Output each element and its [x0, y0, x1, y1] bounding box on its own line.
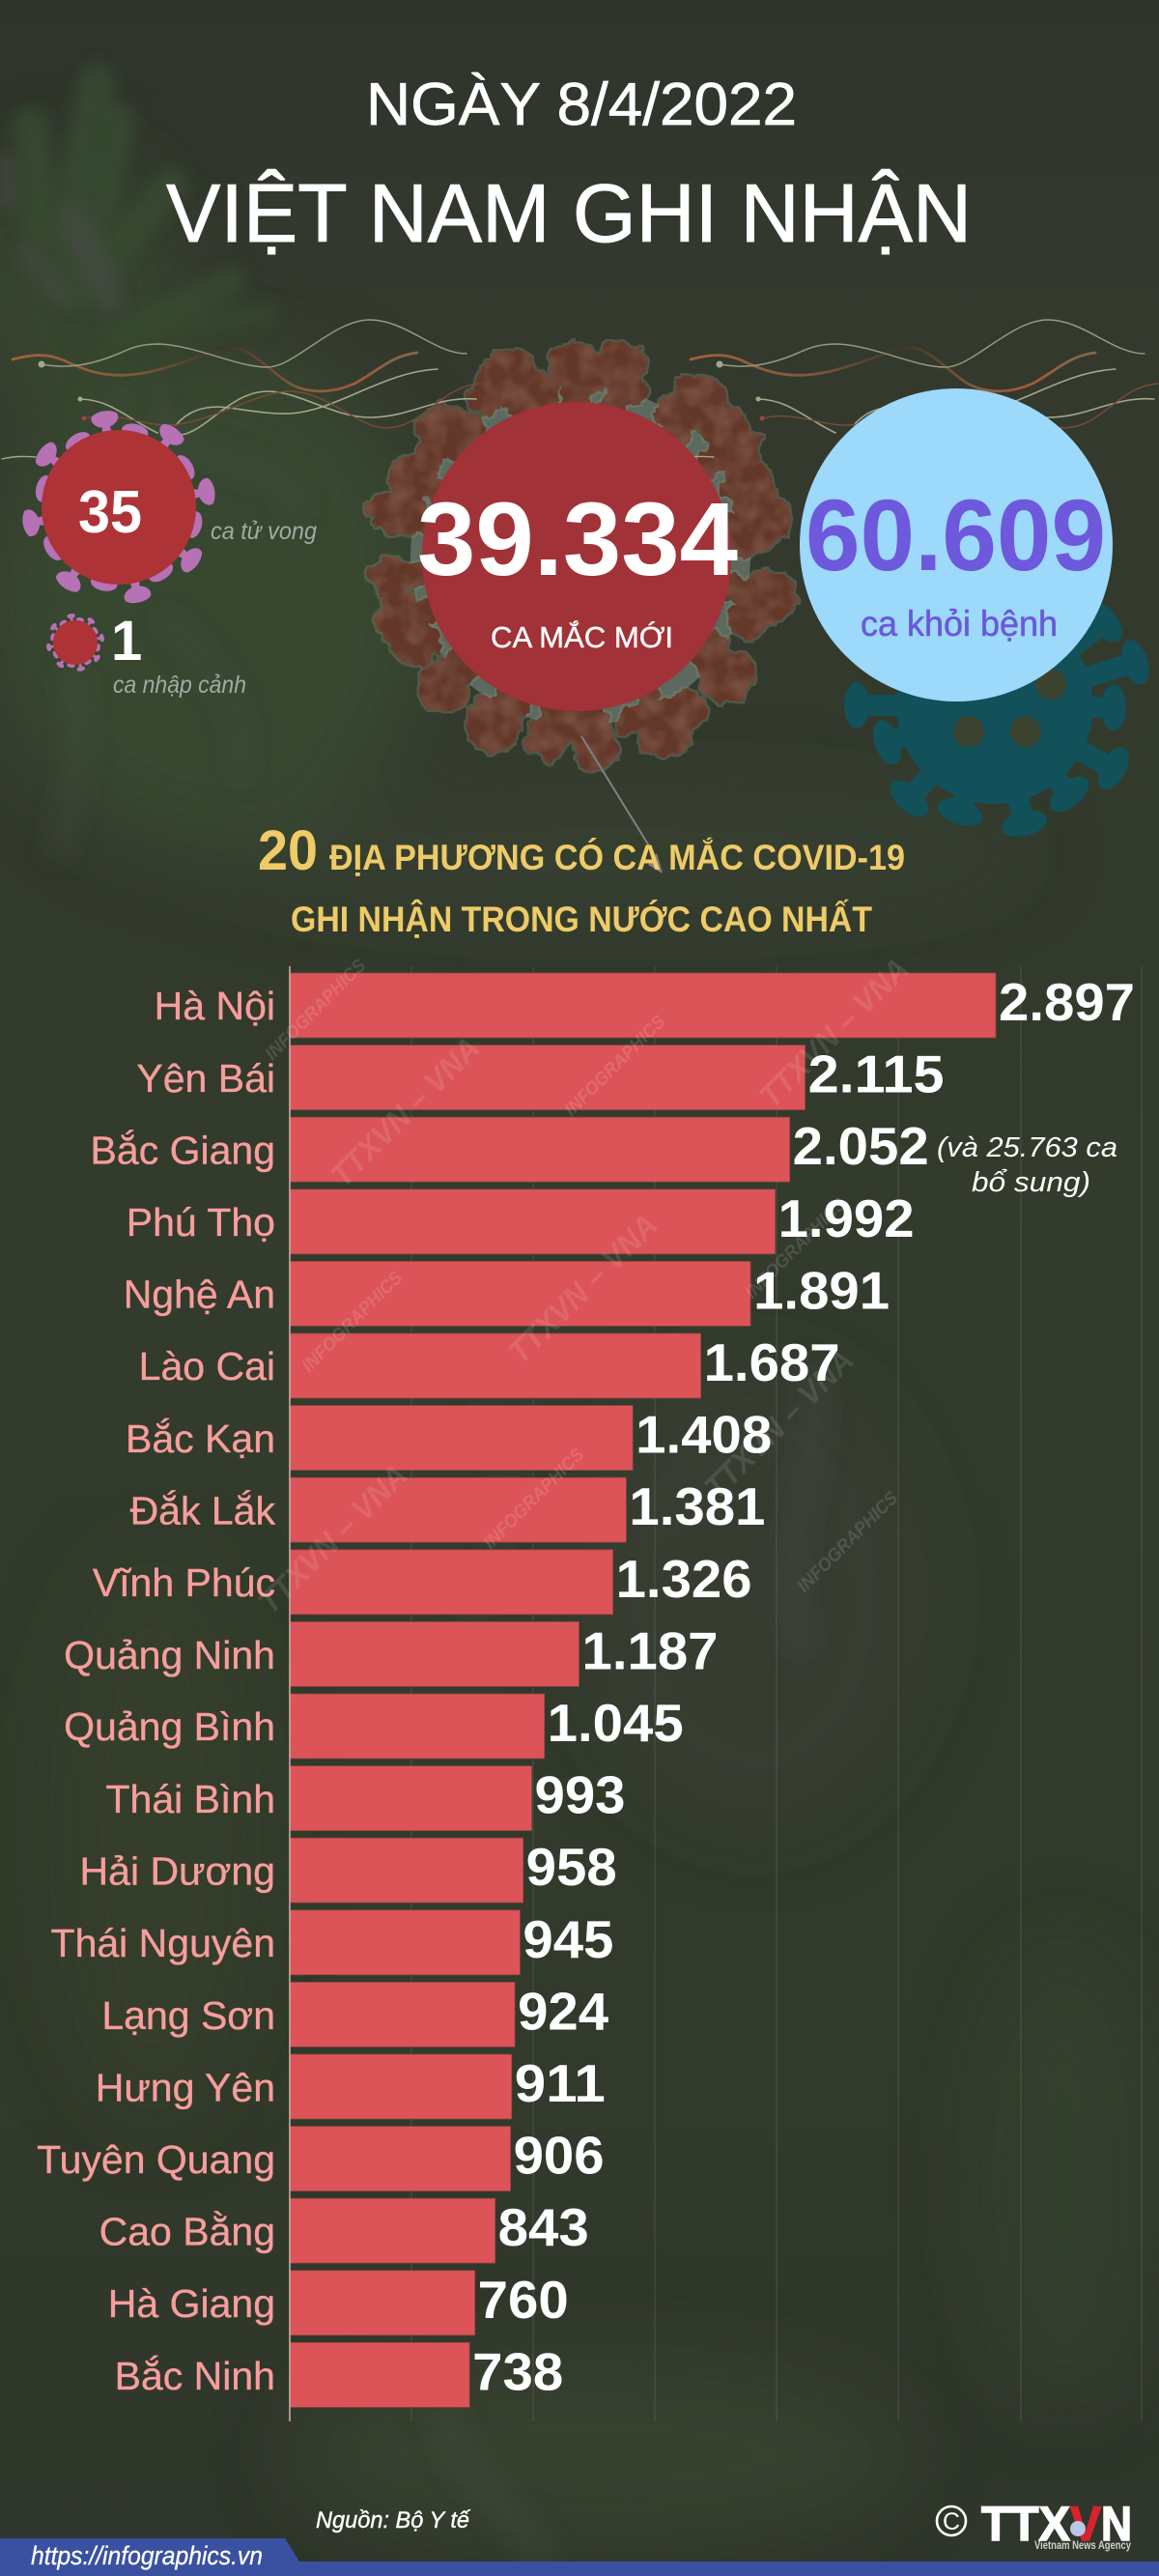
category labels: Nghệ An	[124, 1272, 275, 1316]
category labels: Thái Nguyên	[51, 1921, 275, 1965]
label: imported cases: ca nhập cảnh	[113, 672, 246, 699]
value labels: 924	[518, 1981, 609, 2041]
label: deaths: ca tử vong	[211, 518, 317, 545]
value labels: 906	[514, 2126, 605, 2186]
category labels: Cao Bằng	[99, 2209, 275, 2253]
chart heading: GHI NHẬN TRONG NƯỚC CAO NHẤT	[291, 899, 872, 939]
panel: recovered circle: ca khỏi bệnh	[861, 604, 1058, 644]
source: Nguồn: Bộ Y tế	[316, 2507, 471, 2533]
value labels	[472, 972, 1135, 2401]
footer band with URL tab	[0, 2538, 1159, 2576]
watermarks: INFOGRAPHICS	[480, 1445, 588, 1554]
category labels: Quảng Ninh	[64, 1633, 275, 1677]
icon: teal virus	[844, 596, 1154, 842]
category labels: Lào Cai	[139, 1344, 275, 1388]
value labels: 958	[526, 1837, 617, 1897]
watermarks: INFOGRAPHICS	[262, 956, 370, 1065]
value labels: 1.992	[778, 1188, 915, 1248]
category labels: Hải Dương	[80, 1849, 275, 1894]
watermarks: INFOGRAPHICS	[561, 1012, 669, 1121]
icon: imported case virus with count: 1	[111, 610, 142, 673]
category labels: Quảng Bình	[64, 1704, 275, 1749]
value labels: 760	[478, 2270, 569, 2330]
value labels: 1.045	[548, 1693, 684, 1753]
bar chart	[37, 966, 1142, 2421]
value labels: 911	[515, 2053, 606, 2113]
footer band with URL tab: https://infographics.vn	[31, 2541, 263, 2570]
category labels: Hưng Yên	[96, 2066, 275, 2110]
watermarks: TTXVN – VNA	[251, 1457, 414, 1620]
logo: TTXVN: Vietnam News Agency	[1034, 2538, 1131, 2552]
category labels: Thái Bình	[106, 1777, 275, 1821]
logo: TTXVN: N	[1101, 2497, 1132, 2551]
arrow	[581, 736, 663, 873]
icon: large brown coronavirus	[369, 340, 796, 767]
value labels: 2.897	[999, 972, 1135, 1032]
category labels	[37, 984, 275, 2398]
panel: new cases circle: 39.334	[417, 480, 738, 597]
icon: deaths virus with count: 35	[78, 479, 142, 546]
watermarks	[251, 951, 916, 1620]
title: main heading: VIỆT NAM GHI NHẬN	[166, 168, 972, 260]
category labels: Vĩnh Phúc	[93, 1560, 275, 1605]
chart heading: 20	[258, 819, 318, 882]
strands: left group	[2, 320, 480, 459]
watermarks: TTXVN – VNA	[752, 951, 916, 1114]
icon: deaths virus with count	[20, 409, 217, 605]
value labels: 1.381	[629, 1476, 765, 1536]
note: Bắc Giang additional cases: bổ sung)	[972, 1167, 1090, 1198]
value labels: 1.326	[616, 1549, 752, 1609]
value labels: 1.187	[581, 1620, 719, 1680]
value labels: 738	[472, 2341, 563, 2401]
logo: TTXVN: TTX	[981, 2497, 1070, 2551]
panel: new cases circle: CA MẮC MỚI	[491, 619, 673, 654]
value labels: 1.408	[636, 1405, 772, 1465]
category labels: Bắc Giang	[91, 1129, 275, 1173]
category labels: Tuyên Quang	[37, 2137, 275, 2182]
category labels: Lạng Sơn	[101, 1993, 275, 2038]
value labels: 993	[535, 1765, 626, 1825]
category labels: Hà Nội	[155, 984, 275, 1028]
title: date: NGÀY 8/4/2022	[366, 72, 797, 138]
category labels: Bắc Ninh	[115, 2354, 275, 2398]
category labels: Hà Giang	[108, 2281, 275, 2326]
value labels: 843	[498, 2197, 589, 2257]
logo: TTXVN: C	[943, 2508, 960, 2535]
panel: recovered circle	[800, 388, 1113, 701]
value labels: 2.115	[808, 1045, 945, 1104]
watermarks: INFOGRAPHICS	[794, 1488, 902, 1597]
category labels: Yên Bái	[136, 1056, 275, 1101]
strands: right group	[680, 320, 1158, 459]
logo: TTXVN	[937, 2497, 1132, 2552]
watermarks: TTXVN – VNA	[697, 1342, 861, 1505]
note: Bắc Giang additional cases	[937, 1132, 1117, 1198]
watermarks: INFOGRAPHICS	[742, 1194, 850, 1303]
value labels: 1.687	[704, 1332, 840, 1392]
chart heading: ĐỊA PHƯƠNG CÓ CA MẮC COVID-19	[329, 837, 905, 877]
value labels: 1.891	[753, 1260, 890, 1320]
value labels: 945	[523, 1909, 613, 1969]
note: Bắc Giang additional cases: (và 25.763 ca	[937, 1132, 1117, 1163]
panel: recovered circle: 60.609	[806, 479, 1106, 592]
logo: TTXVN: V	[1070, 2497, 1102, 2551]
panel: new cases circle	[417, 402, 738, 711]
watermarks: INFOGRAPHICS	[298, 1268, 407, 1377]
icon: imported case virus with count	[46, 610, 142, 673]
category labels: Đắk Lắk	[130, 1488, 275, 1532]
watermarks: TTXVN – VNA	[501, 1207, 664, 1370]
value labels: 2.052	[793, 1116, 929, 1176]
watermarks: TTXVN – VNA	[324, 1030, 487, 1193]
category labels: Bắc Kạn	[126, 1417, 275, 1461]
chart heading	[258, 819, 905, 939]
category labels: Phú Thọ	[127, 1200, 275, 1245]
